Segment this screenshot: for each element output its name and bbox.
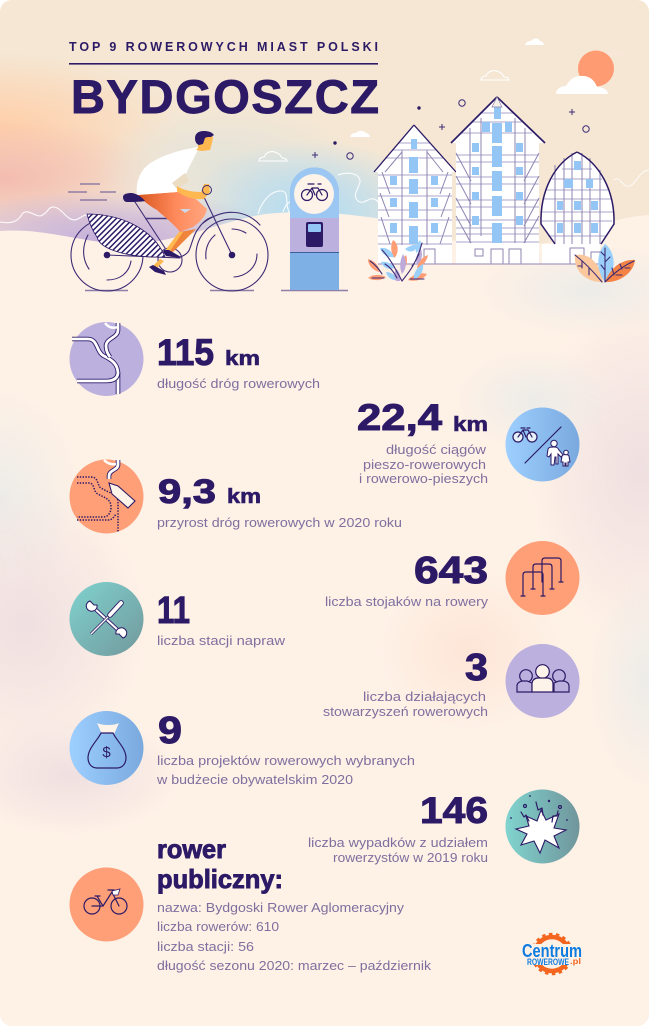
handlebar <box>202 186 212 194</box>
stat: civic budget projects <box>70 710 415 787</box>
stat: associations <box>323 644 580 719</box>
speed lines <box>68 184 116 200</box>
value: 22,4 <box>357 397 442 438</box>
icon: roads <box>70 322 144 396</box>
logo: Centrum Rowerowe: Centrum <box>522 941 582 961</box>
wrench <box>86 601 127 638</box>
icon: money bag <box>70 711 144 785</box>
window panes <box>390 139 438 244</box>
illustration: cyclist <box>68 131 348 291</box>
clouds <box>556 76 608 94</box>
logo: Centrum Rowerowe <box>521 934 583 974</box>
bicycle frame <box>107 195 232 272</box>
station body <box>290 168 339 290</box>
value: 11 <box>157 590 190 632</box>
stat: road growth <box>70 460 402 534</box>
icon: city bike <box>70 868 144 942</box>
label: pieszo-rowerowych <box>363 457 486 472</box>
blue leaves <box>380 240 423 280</box>
value: 9 <box>158 710 182 752</box>
value: 146 <box>420 790 488 831</box>
value: 3 <box>465 647 488 689</box>
ground lines <box>85 290 348 292</box>
station screen <box>306 222 323 247</box>
label: liczba stacji napraw <box>157 633 286 648</box>
icon: group of people <box>506 644 580 718</box>
label: w budżecie obywatelskim 2020 <box>156 772 353 787</box>
stat: accidents <box>308 790 580 865</box>
stat: road growth: km <box>227 486 261 508</box>
label <box>359 442 488 486</box>
details: nazwa: Bydgoski Rower Aglomeracyjny <box>157 900 405 915</box>
heading: publiczny: <box>157 864 283 894</box>
details: liczba stacji: 56 <box>157 939 254 954</box>
stat: shared paths <box>357 397 580 486</box>
shoes <box>163 250 181 258</box>
label <box>323 689 488 719</box>
rider legs <box>138 192 207 232</box>
value: 115 <box>157 332 214 373</box>
orange and peach leaves <box>368 240 428 281</box>
illustration: left plants <box>368 240 428 281</box>
stat: repair stations <box>70 582 286 656</box>
public bike section <box>70 834 432 973</box>
bicycle wheels <box>71 212 268 291</box>
window panes <box>472 107 523 243</box>
window panes <box>557 161 598 233</box>
label: długość ciągów <box>386 442 487 457</box>
label <box>308 835 488 865</box>
icon: dotted route and marker <box>70 460 144 534</box>
screwdriver <box>91 603 121 634</box>
label: rowerzystów w 2019 roku <box>333 850 488 865</box>
sun <box>578 49 628 86</box>
stat: road length: km <box>225 348 260 370</box>
heading: rower <box>157 834 226 864</box>
purple leaves <box>394 249 422 281</box>
label: liczba działających <box>363 689 486 704</box>
label: długość dróg rowerowych <box>157 376 320 391</box>
icon: crash star <box>506 790 580 864</box>
details: długość sezonu 2020: marzec – październik <box>157 958 432 973</box>
rider torso <box>137 147 198 195</box>
small dots and plus signs <box>312 100 589 159</box>
logo: Centrum Rowerowe: ROWEROWE <box>527 957 569 967</box>
icon: money bag: $ <box>102 744 111 761</box>
illustration: right egg-shaped building <box>378 152 614 264</box>
icon: racks <box>506 541 580 615</box>
value: 643 <box>414 550 488 592</box>
saddle <box>123 193 145 202</box>
details <box>157 900 432 973</box>
label: przyrost dróg rowerowych w 2020 roku <box>157 515 402 530</box>
label: liczba projektów rowerowych wybranych <box>157 753 415 768</box>
illustration: middle building <box>451 97 545 264</box>
heading <box>157 834 283 894</box>
rider head <box>196 133 213 151</box>
icon: tools <box>70 582 144 656</box>
stat: shared paths: km <box>453 414 488 436</box>
title <box>69 40 379 123</box>
details: liczba rowerów: 610 <box>157 919 279 934</box>
logo: Centrum Rowerowe: .pl <box>570 957 581 966</box>
label: i rowerowo-pieszych <box>359 471 488 486</box>
stat: bike racks <box>325 541 580 615</box>
illustration: right plants <box>575 244 635 282</box>
icon: bike and pedestrians <box>506 408 580 482</box>
decorative wave lines, left <box>0 170 649 243</box>
illustration: sky decorations <box>259 38 628 161</box>
illustration: left building <box>374 125 456 264</box>
label: stowarzyszeń rowerowych <box>323 704 488 719</box>
label <box>156 753 415 787</box>
illustration: bike station <box>290 168 339 290</box>
stat: road length <box>70 322 320 396</box>
city name: BYDGOSZCZ <box>71 70 379 123</box>
value: 9,3 <box>158 473 216 511</box>
subtitle: TOP 9 ROWEROWYCH MIAST POLSKI <box>69 40 378 54</box>
station bike icon <box>302 184 328 200</box>
label: liczba wypadków z udziałem <box>308 835 488 850</box>
label: liczba stojaków na rowery <box>325 594 489 609</box>
hatched fender leaf <box>87 214 165 257</box>
